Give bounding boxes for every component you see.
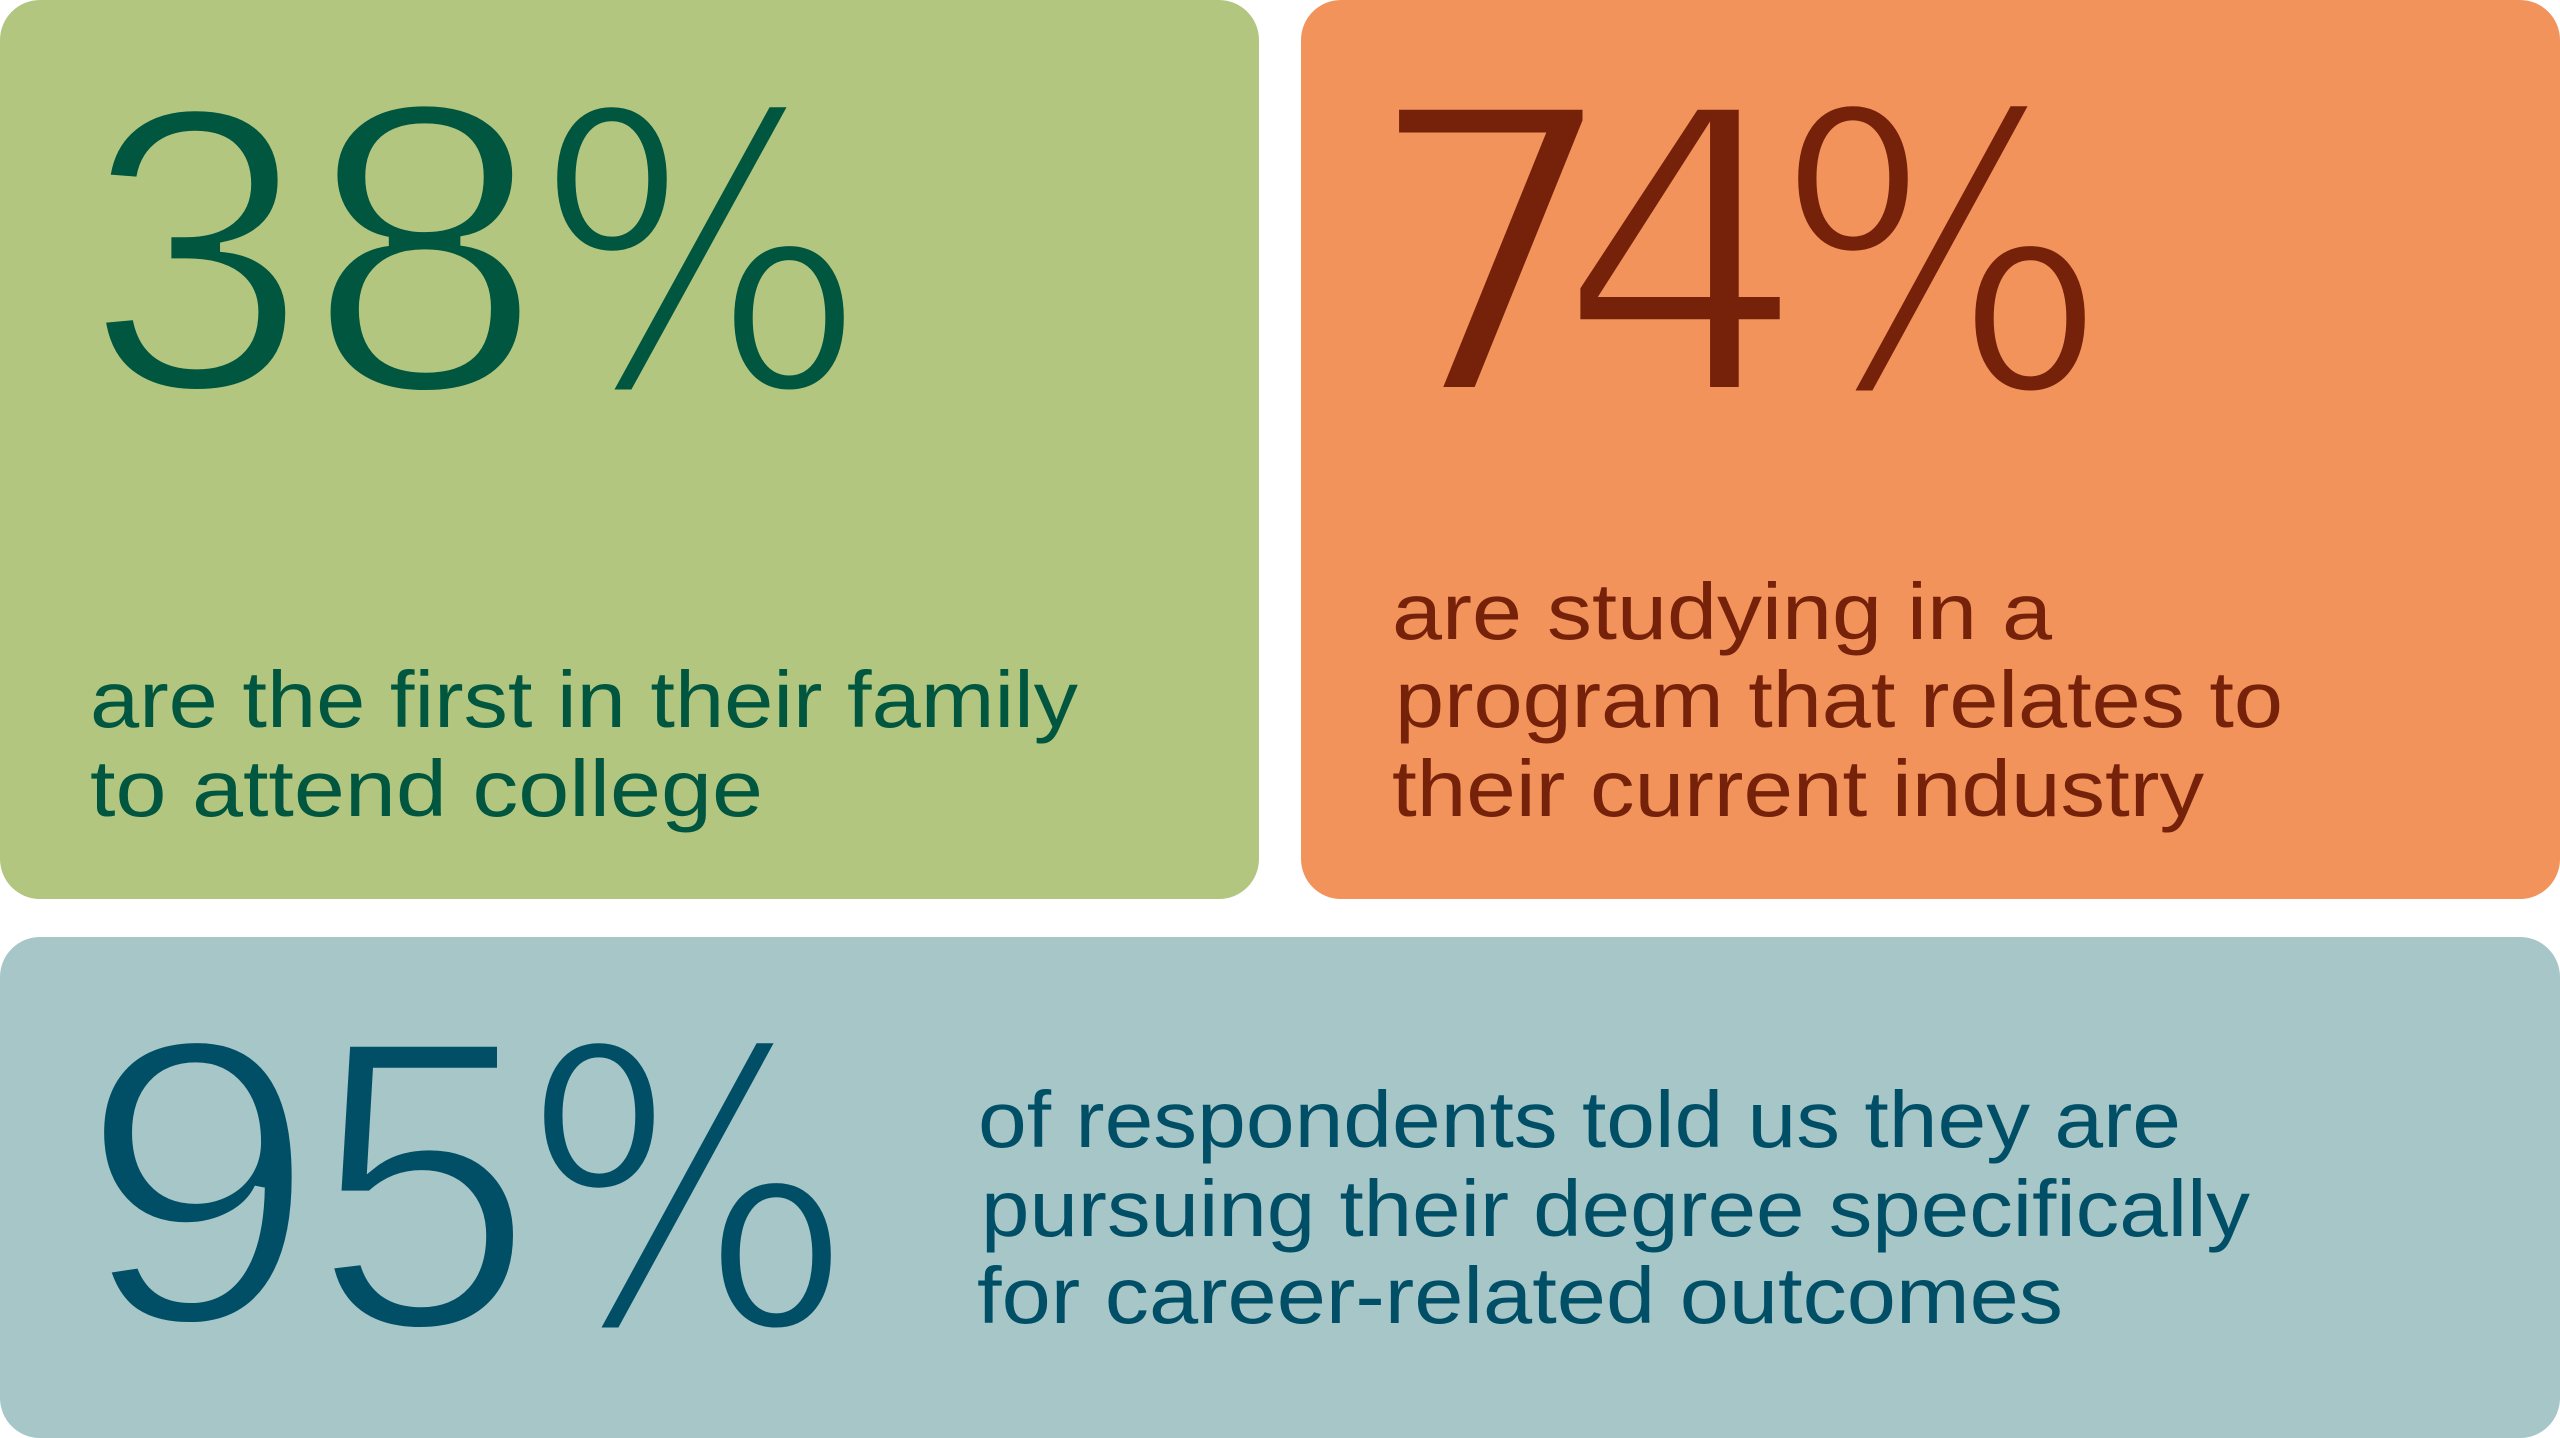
description: related program [1392, 567, 2283, 833]
description: first in family [90, 655, 1078, 833]
statistic: 74% [1360, 26, 2109, 486]
panel: related program [1301, 0, 2560, 899]
description: first in family: to attend college [90, 744, 763, 833]
statistic: 95%: 9 [79, 953, 317, 1410]
description: related program: program that relates to [1395, 655, 2283, 744]
statistic: 38% [85, 15, 868, 481]
description: related program: their current industry [1392, 744, 2204, 833]
description: related program: are studying in a [1392, 567, 2053, 656]
description: first in family: are the first in their family [90, 655, 1078, 744]
statistic: 74%: 7 [1360, 27, 1623, 486]
panel: career outcomes [0, 937, 2560, 1438]
description: career outcomes: of respondents told us they are [978, 1075, 2181, 1164]
description: career outcomes: for career-related outcomes [977, 1251, 2063, 1340]
statistic: 38%: 8 [307, 15, 543, 479]
statistic: 74%: % [1774, 30, 2109, 482]
description: career outcomes [977, 1075, 2250, 1340]
panel background: green [0, 0, 1259, 899]
statistic: 38%: % [533, 32, 868, 481]
statistic: 95%: % [520, 967, 855, 1419]
description: career outcomes: pursuing their degree specifically [981, 1164, 2250, 1253]
statistic: 38%: 3 [85, 23, 308, 477]
statistic: 74%: 4 [1556, 26, 1807, 485]
statistic: 95% [79, 953, 855, 1419]
statistic: 95%: 5 [312, 953, 535, 1417]
panel background: teal [0, 937, 2560, 1438]
panel background: orange [1301, 0, 2560, 899]
panel: first in family [0, 0, 1259, 899]
